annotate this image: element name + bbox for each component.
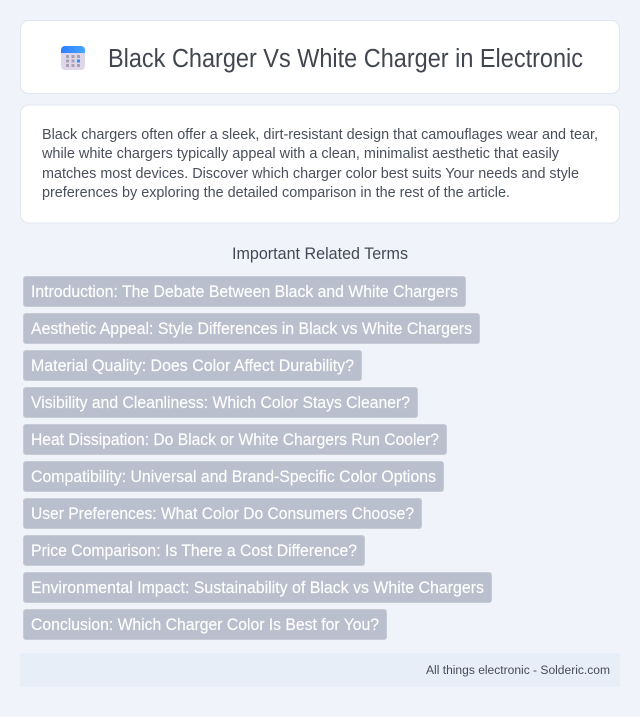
chip: environmental impact [24,572,492,602]
chip: conclusion: Conclusion: Which Charger Color Is Best for You? [31,616,379,634]
footer [20,653,620,687]
chip: material quality: Material Quality: Does Color Affect Durability? [31,357,354,375]
chip: aesthetic appeal [24,314,480,344]
chip: conclusion [24,610,386,640]
chip: environmental impact: Environmental Impact: Sustainability of Black vs White Chargers [31,579,484,597]
chip: compatibility: Compatibility: Universal and Brand-Specific Color Options [31,468,436,486]
chip: heat dissipation: Heat Dissipation: Do Black or White Chargers Run Cooler? [31,431,439,449]
chip: introduction [24,276,466,306]
chip: aesthetic appeal: Aesthetic Appeal: Style Differences in Black vs White Chargers [31,320,472,338]
panel: summary text [20,105,620,223]
chip: heat dissipation [24,424,446,454]
title: Black Charger Vs White Charger in Electronic [108,45,583,73]
chip: material quality [24,350,362,380]
panel: summary text: matches most devices. Discover which charger color best suits Your needs and style [42,166,579,182]
chip: introduction: Introduction: The Debate Between Black and White Chargers [31,283,458,301]
panel: summary text: preferences by exploring the detailed comparison in the rest of the article. [42,185,510,201]
icon: calendar [61,46,85,70]
chip: price comparison [24,536,364,566]
chip: visibility and cleanliness [24,388,418,418]
footer: All things electronic - Solderic.com [426,663,610,677]
chip: user preferences [24,498,422,528]
chip: visibility and cleanliness: Visibility and Cleanliness: Which Color Stays Cleaner? [31,394,410,412]
chip: user preferences: User Preferences: What Color Do Consumers Choose? [31,505,414,523]
list of term chips [24,276,492,640]
heading: important related terms: Important Related Terms [232,245,408,263]
panel: summary text: while white chargers typically appeal with a clean, minimalist aesthetic that easily [41,146,560,162]
panel: title header [20,20,620,94]
chip: price comparison: Price Comparison: Is There a Cost Difference? [31,542,357,560]
chip: compatibility [24,462,444,492]
panel: summary text: Black chargers often offer a sleek, dirt-resistant design that camouflages wear and tear, [42,127,598,143]
